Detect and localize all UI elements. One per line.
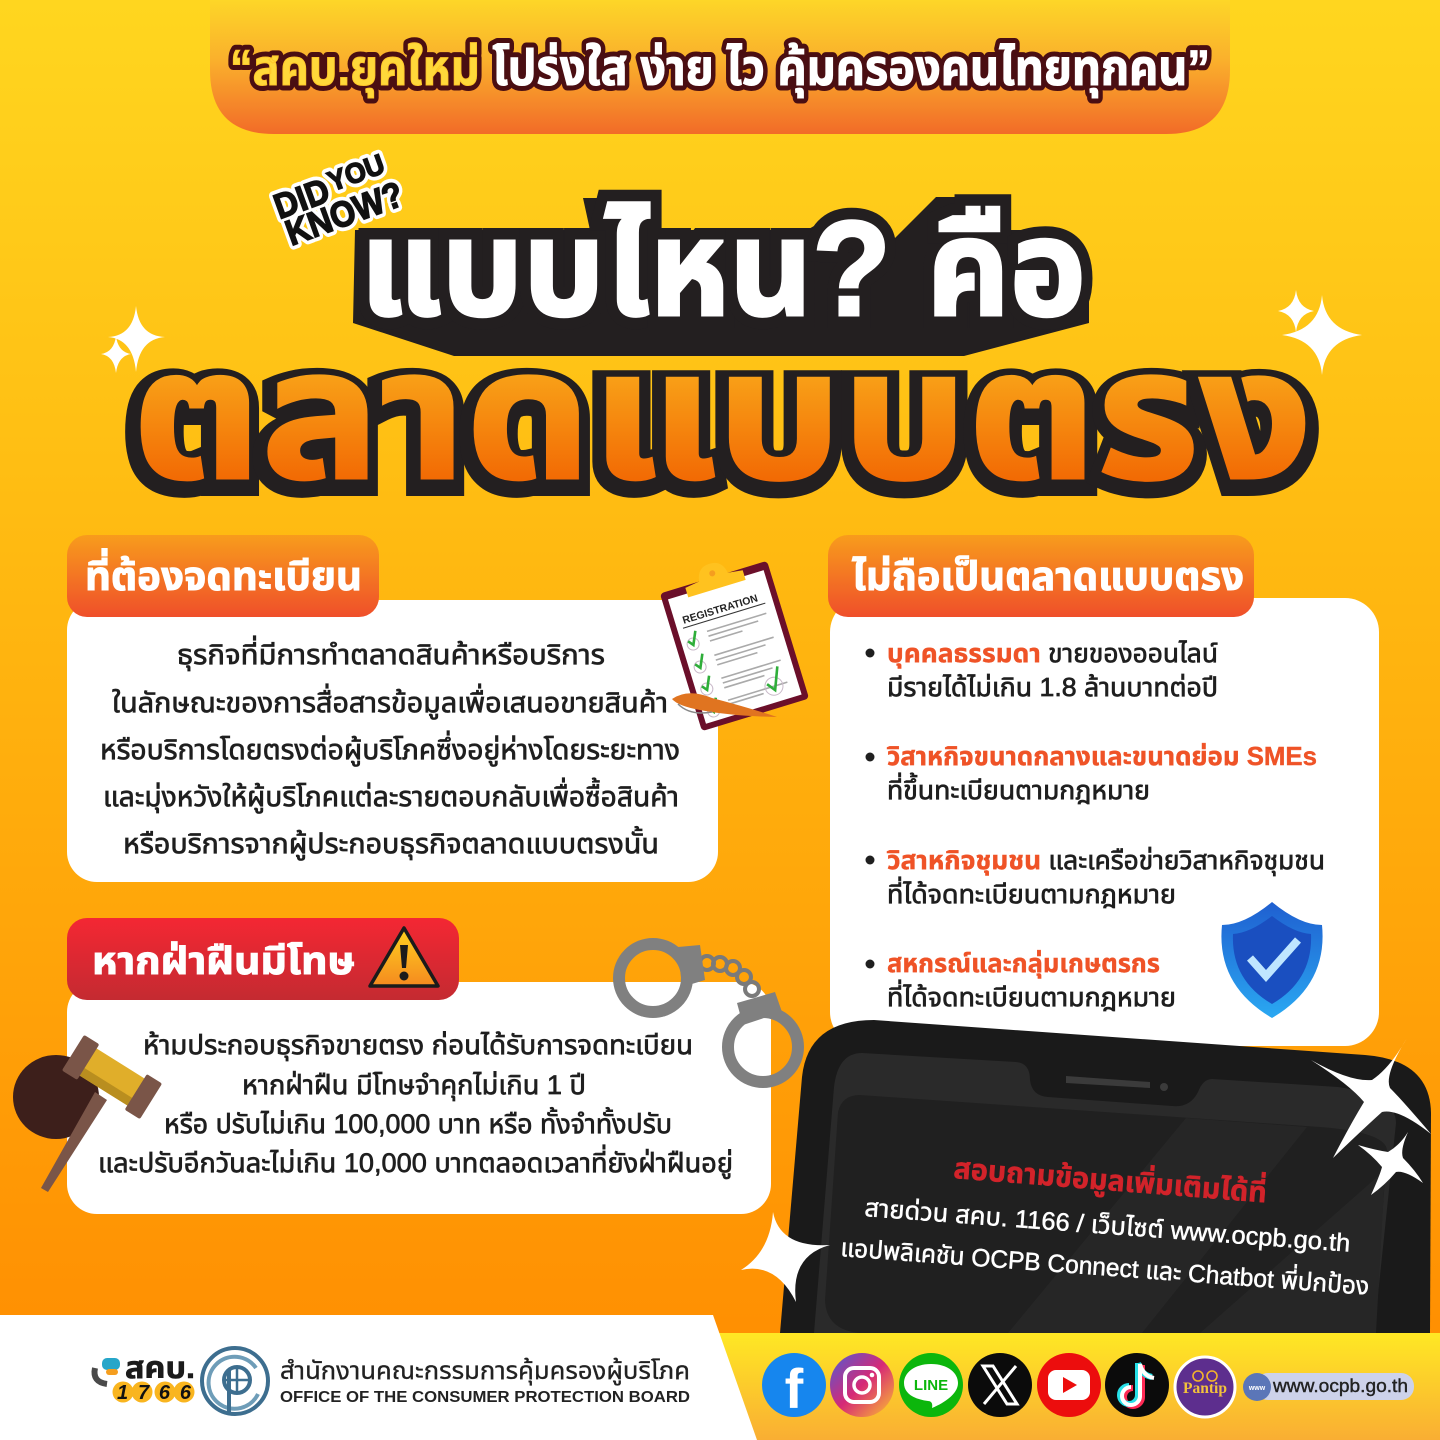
panel body [67, 600, 718, 882]
footer white panel [0, 1315, 757, 1440]
list item 3: ที่ได้จดทะเบียนตามกฎหมาย [887, 876, 1176, 909]
icon: line: LINE [914, 1377, 948, 1394]
did you know badge: KNOW? [280, 173, 409, 253]
panel body [830, 598, 1379, 1046]
list item 2: ที่ขึ้นทะเบียนตามกฎหมาย [887, 772, 1150, 805]
logo: 1766 hotline [94, 1352, 195, 1404]
icon: pantip [1175, 1357, 1235, 1417]
organisation name [280, 1357, 690, 1406]
panel: penalty [67, 918, 771, 1214]
list item 4: ที่ได้จดทะเบียนตามกฎหมาย [887, 979, 1176, 1012]
panel text: หรือ ปรับไม่เกิน 100,000 บาท หรือ ทั้งจำทั้งปรับ [164, 1107, 672, 1139]
did you know badge: DID [269, 171, 335, 227]
icon: tiktok [1105, 1353, 1169, 1417]
panel text: ธุรกิจที่มีการทำตลาดสินค้าหรือบริการ [177, 635, 605, 671]
icon: x [968, 1353, 1032, 1417]
panel: not direct marketing [828, 535, 1379, 1046]
title shadow block [353, 197, 1089, 356]
list item 3 [866, 845, 1325, 909]
did you know badge [268, 146, 409, 254]
list item 3: วิสาหกิจชุมชน และเครือข่ายวิสาหกิจชุมชน [887, 845, 1325, 876]
icon: registration clipboard [656, 547, 809, 731]
footer yellow band [715, 1333, 1440, 1440]
phone bezel [814, 1053, 1396, 1333]
panel text: หรือบริการโดยตรงต่อผู้บริโภคซึ่งอยู่ห่างโดยระยะทาง [100, 730, 680, 767]
phone [780, 1020, 1431, 1333]
sparkles left [101, 306, 165, 373]
sparkles on phone [741, 1038, 1431, 1302]
main title [129, 193, 1313, 522]
icon: line [899, 1353, 963, 1417]
icon: warning [370, 928, 438, 986]
panel text: ในลักษณะของการสื่อสารข้อมูลเพื่อเสนอขายสินค้า [112, 683, 668, 720]
pen [672, 693, 777, 717]
header slogan: “สคบ.ยุคใหม่ โปร่งใส ง่าย ไว คุ้มครองคนไทยทุกคน” [230, 40, 1210, 98]
icon: youtube [1037, 1353, 1101, 1417]
phone body [780, 1020, 1431, 1333]
logo: OCPB emblem [202, 1348, 268, 1414]
organisation name: OFFICE OF THE CONSUMER PROTECTION BOARD [280, 1389, 690, 1406]
sparkles right [1278, 290, 1362, 375]
website pill [1243, 1373, 1414, 1401]
organisation name: สำนักงานคณะกรรมการคุ้มครองผู้บริโภค [280, 1357, 690, 1386]
icon: registration clipboard: REGISTRATION [681, 592, 759, 627]
header slogan: “สคบ.ยุคใหม่ โปร่งใส ง่าย ไว คุ้มครองคนไทยทุกคน” [230, 40, 1210, 98]
did you know badge: YOU [324, 148, 389, 197]
header banner [210, 0, 1230, 134]
phone text: สายด่วน สคบ. 1166 / เว็บไซต์ www.ocpb.go.th [864, 1194, 1351, 1258]
phone screen [825, 1095, 1387, 1333]
title line 2: ตลาดแบบตรง [132, 313, 1312, 517]
icon: handcuffs [619, 944, 798, 1082]
panel text [100, 635, 680, 861]
panel text: และมุ่งหวังให้ผู้บริโภคแต่ละรายตอบกลับเพื่อซื้อสินค้า [103, 777, 679, 814]
icon: pantip: Pantip [1183, 1380, 1227, 1397]
list item 1: บุคคลธรรมดา ขายของออนไลน์ [887, 638, 1218, 669]
panel: must register [67, 535, 718, 882]
list item 1 [866, 638, 1218, 702]
panel heading: ไม่ถือเป็นตลาดแบบตรง [852, 554, 1244, 599]
logo: 1766 hotline: สคบ. [125, 1352, 195, 1385]
list item 4: สหกรณ์และกลุ่มเกษตรกร [887, 948, 1160, 979]
icon: shield [1221, 902, 1323, 1018]
speaker [1066, 1076, 1150, 1088]
title line 1: แบบไหน? คือ [360, 193, 1086, 344]
panel body [67, 982, 771, 1214]
panel text: ห้ามประกอบธุรกิจขายตรง ก่อนได้รับการจดทะเบียน [143, 1030, 693, 1061]
panel heading [67, 535, 379, 617]
did you know badge: YOU [324, 148, 389, 197]
panel text: และปรับอีกวันละไม่เกิน 10,000 บาทตลอดเวลาที่ยังฝ่าฝืนอยู่ [98, 1144, 733, 1179]
icon: instagram [830, 1353, 894, 1417]
logo: 1766 hotline: 1766 [117, 1382, 192, 1404]
panel heading [67, 918, 459, 1000]
title line 1: แบบไหน? คือ [360, 193, 1086, 344]
list item 1: มีรายได้ไม่เกิน 1.8 ล้านบาทต่อปี [887, 672, 1218, 702]
panel heading [828, 535, 1254, 617]
title line 2: ตลาดแบบตรง [129, 318, 1313, 522]
icon: facebook: f [785, 1357, 804, 1420]
list item 2 [866, 741, 1317, 805]
panel text: หากฝ่าฝืน มีโทษจำคุกไม่เกิน 1 ปี [242, 1070, 586, 1101]
phone text [840, 1147, 1370, 1301]
panel text: หรือบริการจากผู้ประกอบธุรกิจตลาดแบบตรงนั้น [123, 826, 659, 861]
phone text: แอปพลิเคชัน OCPB Connect และ Chatbot พี่ปกป้อง [840, 1230, 1370, 1301]
website pill: www [1248, 1385, 1266, 1392]
panel heading: หากฝ่าฝืนมีโทษ [92, 941, 355, 983]
website pill: www.ocpb.go.th [1272, 1376, 1408, 1396]
did you know badge: DID [269, 171, 335, 227]
panel heading: ที่ต้องจดทะเบียน [85, 548, 362, 599]
list item 4 [866, 948, 1176, 1012]
icon: facebook [762, 1353, 826, 1420]
icon: gavel [13, 1035, 162, 1192]
did you know badge: KNOW? [280, 173, 409, 253]
list item 2: วิสาหกิจขนาดกลางและขนาดย่อม SMEs [887, 741, 1317, 771]
panel text [98, 1030, 733, 1179]
phone text: สอบถามข้อมูลเพิ่มเติมได้ที่ [952, 1147, 1268, 1211]
